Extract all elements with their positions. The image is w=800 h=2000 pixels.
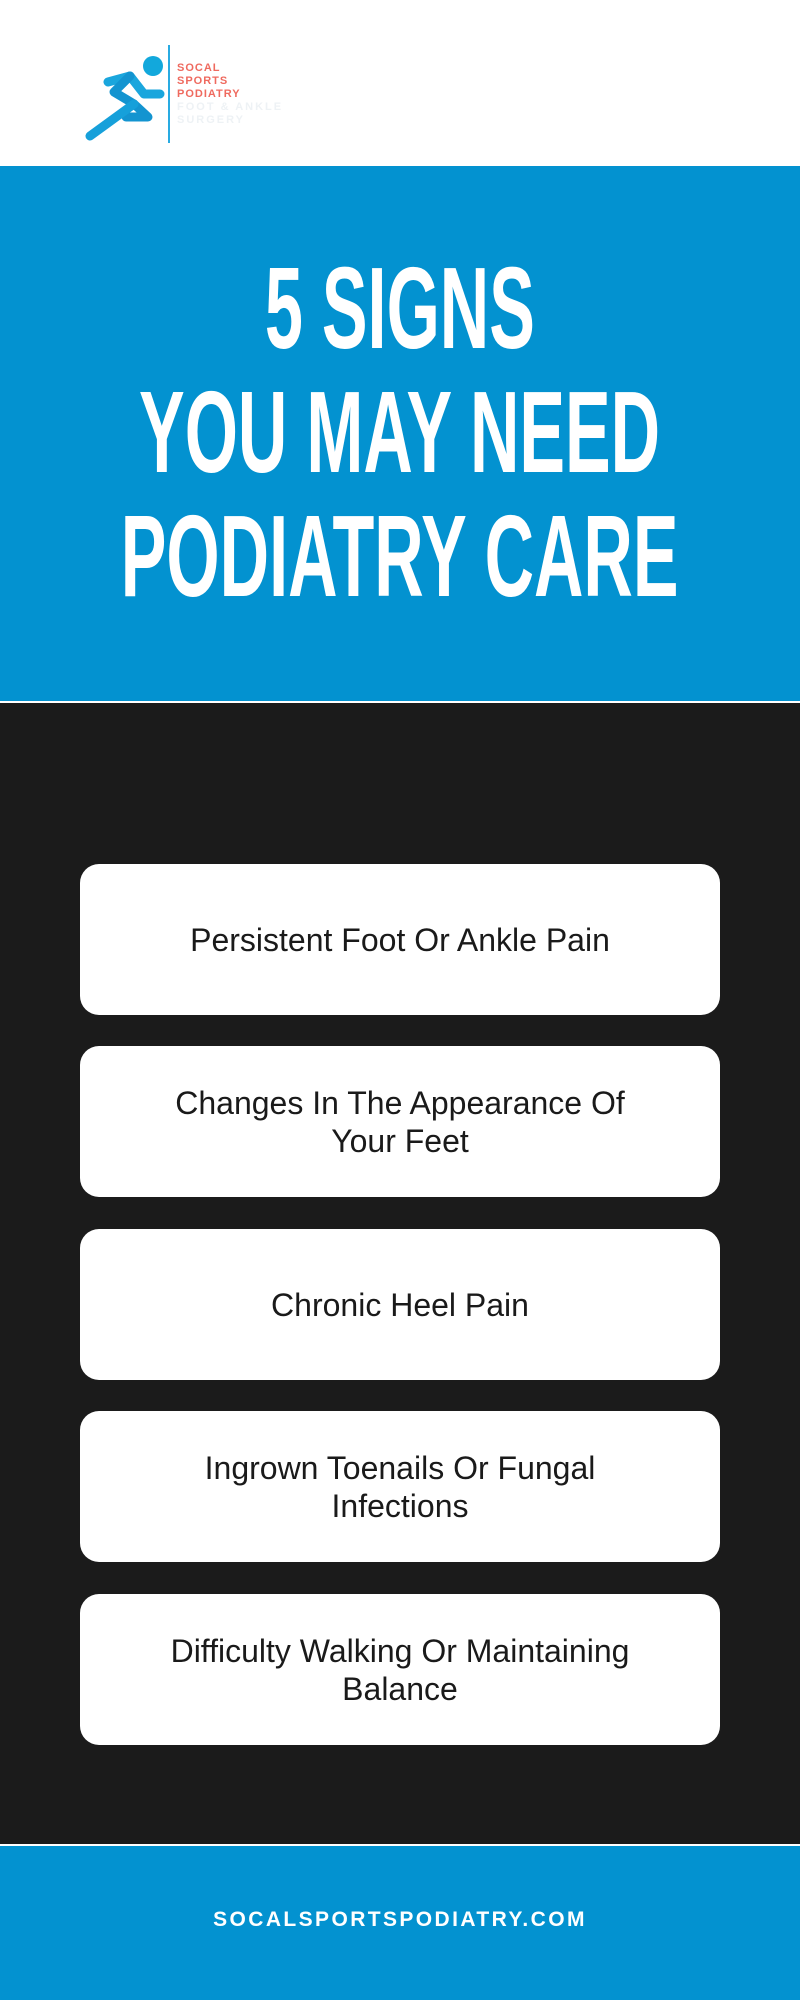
title panel xyxy=(0,166,800,701)
title: 5 SIGNS xyxy=(265,243,535,373)
logo text: PODIATRY xyxy=(177,88,241,100)
title: YOU MAY NEED xyxy=(139,367,661,497)
logo text: SOCAL xyxy=(177,62,220,74)
icon: runner xyxy=(86,56,164,140)
card 1 xyxy=(80,864,720,1015)
logo text: SURGERY xyxy=(177,114,245,126)
logo xyxy=(86,45,283,143)
card 1: Persistent Foot Or Ankle Pain xyxy=(190,922,610,958)
card 4 xyxy=(80,1411,720,1562)
logo text: FOOT & ANKLE xyxy=(177,101,283,113)
header: white logo bar xyxy=(0,0,800,166)
card 5: Difficulty Walking Or Maintaining Balance xyxy=(171,1632,629,1706)
card 2 xyxy=(80,1046,720,1197)
divider xyxy=(168,45,170,143)
card 3 xyxy=(80,1229,720,1380)
footer xyxy=(0,1846,800,2000)
card 3: Chronic Heel Pain xyxy=(271,1286,529,1322)
card 2: Changes In The Appearance Of Your Feet xyxy=(175,1084,625,1158)
title xyxy=(121,243,679,621)
logo text xyxy=(177,62,283,126)
card 4: Ingrown Toenails Or Fungal Infections xyxy=(205,1450,595,1524)
logo text: SPORTS xyxy=(177,75,228,87)
title: PODIATRY CARE xyxy=(121,491,679,621)
footer url: SOCALSPORTSPODIATRY.COM xyxy=(213,1908,587,1931)
card 5 xyxy=(80,1594,720,1745)
